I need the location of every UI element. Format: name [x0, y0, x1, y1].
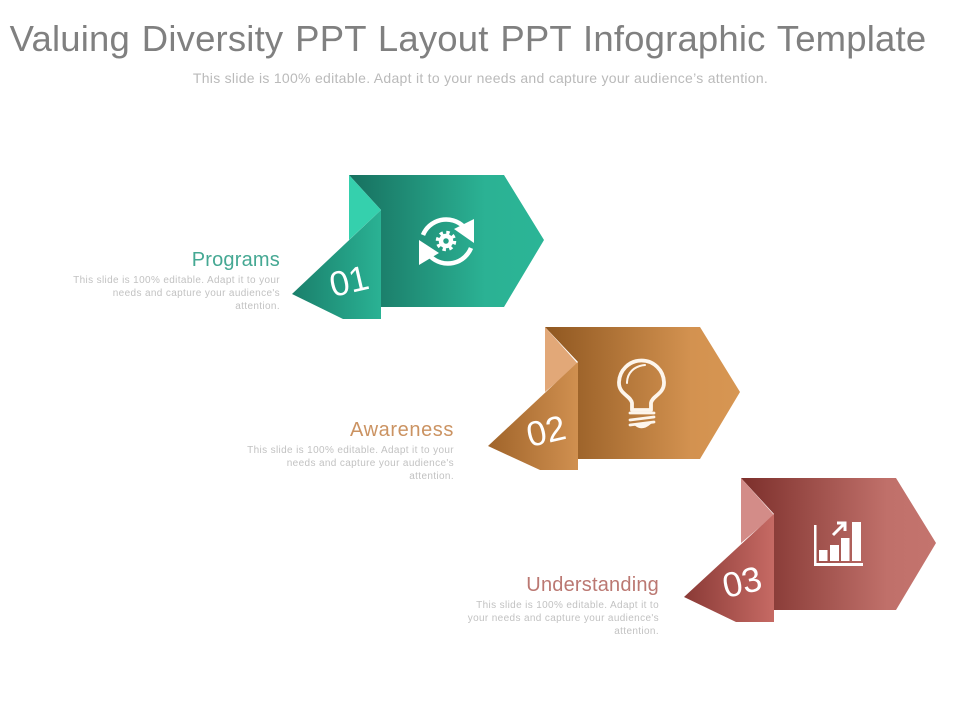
text block: awareness	[247, 419, 454, 482]
arrow 03: understanding	[684, 478, 936, 622]
icon: rising bar chart	[814, 522, 863, 566]
text block: programs: attention.	[235, 301, 280, 312]
text block: programs: needs and capture your audience's	[113, 288, 280, 299]
text block: understanding: your needs and capture your audience's	[468, 613, 659, 624]
arrow 02: awareness	[488, 327, 740, 470]
fold highlight 02	[545, 327, 578, 392]
number tab 03: 03	[719, 559, 765, 606]
number tab 01	[292, 210, 381, 319]
text block: programs: Programs	[192, 249, 280, 271]
subtitle: This slide is 100% editable. Adapt it to your needs and capture your audience’s attention.	[193, 70, 768, 86]
text block: programs	[73, 249, 280, 312]
text block: understanding: attention.	[614, 626, 659, 637]
text block: awareness: Awareness	[350, 419, 454, 441]
fold highlight 03	[741, 478, 774, 543]
text block: programs: This slide is 100% editable. Adapt it to your	[73, 275, 280, 286]
number tab 03	[684, 514, 774, 622]
arrow 01: programs	[292, 175, 544, 319]
icon: light bulb	[619, 360, 664, 428]
title: Valuing Diversity PPT Layout PPT Infographic Template	[10, 18, 926, 59]
text block: understanding	[468, 574, 659, 637]
arrow body 02	[545, 327, 740, 459]
text block: awareness: This slide is 100% editable. Adapt it to your	[247, 445, 454, 456]
number tab 02: 02	[523, 408, 569, 455]
number tab 01: 01	[326, 258, 372, 305]
text block: understanding: Understanding	[526, 574, 659, 596]
icon: gear with cycle arrows	[419, 219, 474, 265]
arrow body 03	[741, 478, 936, 610]
arrow body 01	[349, 175, 544, 307]
number tab 02	[488, 362, 578, 470]
fold highlight 01	[349, 175, 381, 240]
text block: awareness: attention.	[409, 471, 454, 482]
text block: awareness: needs and capture your audience's	[287, 458, 454, 469]
text block: understanding: This slide is 100% editable. Adapt it to	[476, 600, 659, 611]
